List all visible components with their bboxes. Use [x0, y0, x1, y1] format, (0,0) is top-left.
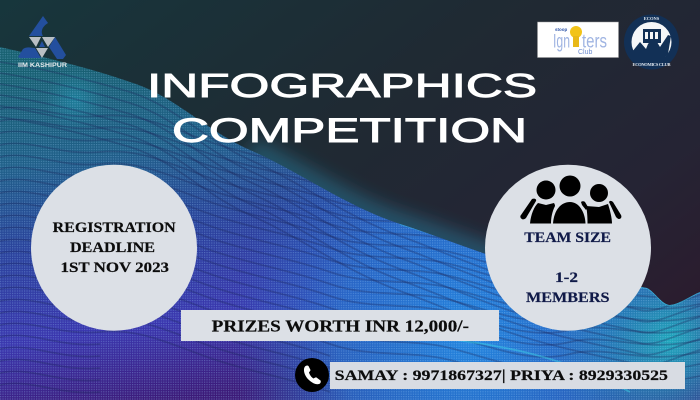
logo: Igniters Club: ters: [582, 32, 607, 52]
panel: team size: [485, 165, 651, 331]
logo: Igniters Club: Ign: [553, 32, 570, 52]
banner: prizes: [181, 310, 499, 341]
panel: registration deadline: DEADLINE: [70, 240, 155, 256]
logo: Economics Club: ECONOMICS CLUB: [632, 62, 670, 67]
icon: team: [520, 176, 621, 224]
logo: Igniters Club: [538, 22, 618, 58]
title: INFOGRAPHICS: [147, 68, 537, 105]
banner: contact: SAMAY : 9971867327| PRIYA : 8929330525: [335, 368, 668, 384]
panel: team size: MEMBERS: [526, 290, 610, 306]
panel: registration deadline: [31, 165, 197, 331]
panel: registration deadline: REGISTRATION: [53, 220, 176, 236]
logo: Igniters Club: Club: [578, 49, 593, 56]
logo: Economics Club: [624, 14, 679, 70]
panel: registration deadline: 1ST NOV 2023: [60, 260, 169, 276]
logo text: IIM KASHIPUR: [18, 62, 67, 69]
logo: Igniters Club: stoop: [555, 27, 567, 32]
panel: team size: 1-2: [555, 270, 578, 286]
wave glow: [250, 150, 560, 276]
icon: phone: [295, 358, 329, 392]
title: COMPETITION: [172, 112, 527, 150]
banner: prizes: PRIZES WORTH INR 12,000/-: [212, 316, 469, 336]
logo: Economics Club: ECONS: [644, 16, 660, 21]
panel: team size: TEAM SIZE: [524, 230, 611, 246]
banner: contact: [330, 362, 685, 389]
title: [147, 68, 537, 150]
logo: IIM Kashipur: [18, 16, 67, 69]
